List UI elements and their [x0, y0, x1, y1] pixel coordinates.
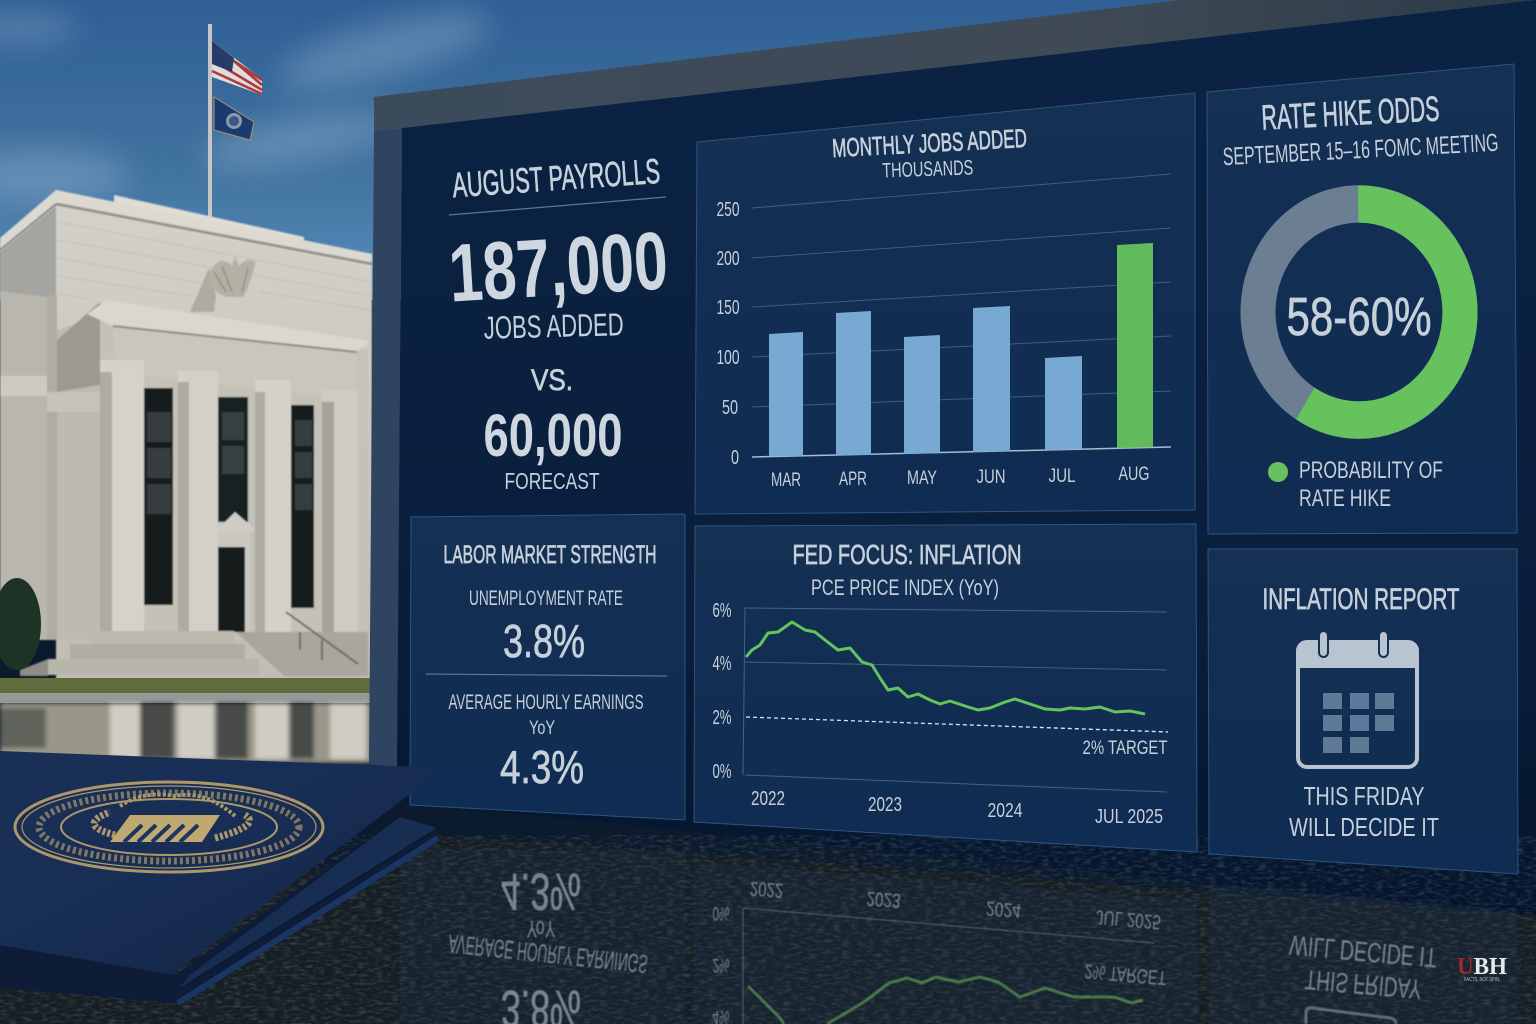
- legend: probability of rate hike: PROBABILITY OF: [1299, 457, 1443, 484]
- line chart: 2%: [712, 707, 732, 729]
- legend: probability of rate hike: [1268, 457, 1443, 512]
- donut chart: [1258, 204, 1460, 420]
- caption: this friday will decide it: THIS FRIDAY: [1304, 781, 1424, 811]
- line chart: 6%: [712, 600, 732, 622]
- donut value: 58-60%: [1286, 287, 1432, 347]
- line chart: [712, 600, 1168, 828]
- flagpole with flags: [208, 24, 262, 218]
- label: vs: VS.: [531, 364, 573, 397]
- federal reserve building: [0, 190, 372, 700]
- table reflections: 2023: [866, 887, 901, 911]
- label: jobs added: JOBS ADDED: [483, 306, 624, 346]
- table reflections: 2022: [749, 877, 784, 901]
- icon: navy flag: [214, 97, 254, 140]
- lawn and reflecting pool: [0, 678, 372, 763]
- metric: unemployment rate: [469, 587, 623, 667]
- table reflections: 2024: [985, 897, 1022, 921]
- bar chart: APR: [839, 469, 867, 490]
- bar chart: AUG: [1118, 464, 1150, 485]
- big number: jobs added: 187,000: [446, 215, 670, 320]
- panel: labor market strength: [410, 514, 685, 820]
- line chart: 0%: [712, 761, 732, 783]
- metric: unemployment rate: UNEMPLOYMENT RATE: [469, 587, 623, 610]
- folder with federal reserve seal: [0, 751, 438, 1003]
- subheading: thousands: THOUSANDS: [882, 156, 974, 183]
- bar chart: 0: [731, 447, 739, 469]
- line chart: 2022: [751, 788, 785, 810]
- display board frame: [369, 0, 1536, 916]
- icon: calendar: [1296, 631, 1419, 767]
- table: [0, 835, 1536, 1024]
- shrub: [0, 578, 41, 670]
- bar chart: JUL: [1048, 466, 1076, 487]
- bar chart: MAY: [907, 468, 937, 489]
- panel: fed focus inflation: [694, 524, 1197, 852]
- table reflections: WILL DECIDE IT: [1288, 930, 1438, 973]
- line chart: 2023: [868, 794, 902, 816]
- heading: monthly jobs added: MONTHLY JOBS ADDED: [831, 123, 1028, 163]
- steps: [236, 632, 368, 676]
- legend: probability of rate hike: RATE HIKE: [1299, 485, 1391, 512]
- panel: inflation report: [1208, 549, 1518, 874]
- eagle: [190, 256, 256, 314]
- metric: average hourly earnings: 4.3%: [500, 741, 584, 793]
- line chart: 2024: [988, 800, 1022, 822]
- label: 2% target: 2% TARGET: [1082, 738, 1168, 759]
- bar chart: 150: [716, 297, 740, 319]
- bar chart: 50: [722, 397, 738, 419]
- subheading: pce price index: PCE PRICE INDEX (YoY): [811, 575, 999, 600]
- table reflections: 2%: [712, 954, 730, 975]
- table reflections: 0%: [712, 902, 730, 923]
- bar chart: JUN: [976, 467, 1006, 488]
- panel: inflation report: WILL DECIDE IT: [1289, 812, 1439, 842]
- panel: rate hike odds: [1207, 64, 1517, 534]
- table reflections: THIS FRIDAY: [1304, 964, 1423, 1005]
- big number: forecast: 60,000: [484, 402, 622, 469]
- bar chart: 100: [716, 347, 740, 369]
- table reflections: JUL 2025: [1095, 905, 1162, 933]
- columns: [100, 360, 144, 632]
- panel: monthly jobs chart: [695, 93, 1195, 514]
- bar chart: 200: [716, 248, 740, 270]
- heading: labor market strength: LABOR MARKET STRENGTH: [444, 541, 656, 569]
- line chart: 4%: [712, 653, 732, 675]
- front wall: [56, 190, 372, 700]
- bar chart: 250: [716, 199, 740, 221]
- metric: average hourly earnings: [448, 691, 644, 793]
- table reflections: AVERAGE HOURLY EARNINGS: [447, 929, 649, 979]
- table reflections: [447, 862, 1438, 1024]
- icon: american flag: [212, 41, 262, 95]
- metric: average hourly earnings: AVERAGE HOURLY EARNINGS: [448, 691, 644, 714]
- line chart: JUL 2025: [1095, 806, 1163, 828]
- table reflections: 4.3%: [501, 862, 581, 920]
- portico: [100, 320, 368, 640]
- parapet and cornice: [114, 195, 304, 245]
- windows: [142, 388, 173, 605]
- table reflections: 2% TARGET: [1084, 959, 1167, 989]
- metric: unemployment rate: 3.8%: [503, 615, 585, 667]
- table reflections: YoY: [526, 915, 556, 942]
- icon: federal reserve seal: [15, 782, 323, 872]
- logo: UBH: FACTS. NOT SPIN.: [1464, 977, 1500, 983]
- logo: UBH: UBH: [1457, 954, 1507, 980]
- left side wall: [0, 192, 56, 640]
- heading: fed focus inflation: FED FOCUS: INFLATION: [792, 539, 1022, 570]
- heading: august payrolls: AUGUST PAYROLLS: [451, 152, 661, 205]
- metric: average hourly earnings: YoY: [529, 718, 555, 739]
- panel: august payrolls: [446, 152, 670, 494]
- sky background: [0, 0, 1536, 300]
- bar chart: [716, 174, 1171, 491]
- label: forecast: FORECAST: [504, 468, 600, 494]
- bar chart: MAR: [771, 470, 801, 491]
- left wing: [0, 291, 47, 640]
